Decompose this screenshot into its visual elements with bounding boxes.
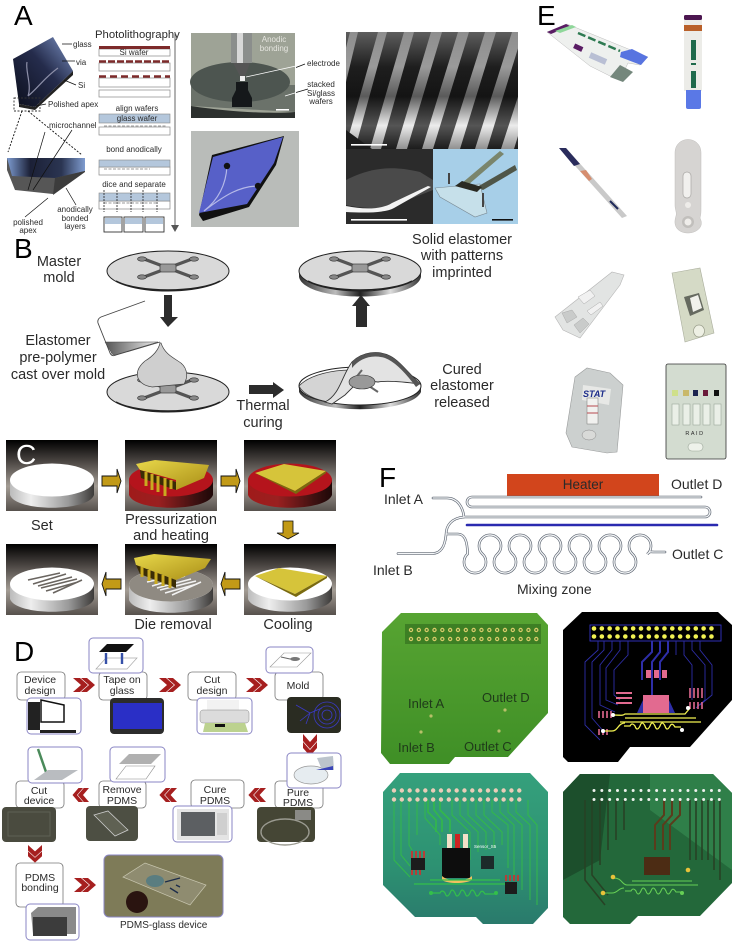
label: cured elastomer <box>430 362 494 411</box>
step: cut device: Cut <box>31 785 47 797</box>
photo: anodic bonding: Anodic <box>262 35 286 44</box>
device: wedge cassette <box>555 272 624 338</box>
step: cut design: design <box>197 685 228 697</box>
arrow right <box>249 382 284 398</box>
device: RAID cassette <box>666 364 726 459</box>
beaker pouring <box>98 301 160 356</box>
device: cassette 2 <box>672 268 714 342</box>
panel C: hot embossing <box>6 439 336 633</box>
arrow <box>221 469 240 493</box>
SEM images and device photo <box>346 32 518 224</box>
block labels: apex <box>19 226 37 235</box>
step: tape on glass: Tape on <box>103 674 141 686</box>
device: test strip 1 <box>547 24 648 82</box>
panel F: microfluidic PCB <box>373 462 732 924</box>
photolithography steps: Si wafer <box>120 48 149 57</box>
device: test strip 2 <box>684 15 702 109</box>
step: mold <box>266 647 341 733</box>
photolithography steps: bond anodically <box>106 145 162 154</box>
label: master mold: mold <box>43 270 75 286</box>
block labels: polished <box>13 218 43 227</box>
chevron <box>28 845 42 863</box>
panel D: PDMS workflow <box>2 636 341 940</box>
panel letter F: F <box>379 462 396 493</box>
chip labels: glass <box>73 40 92 49</box>
photo labels: stacked <box>307 80 335 89</box>
chevron <box>248 788 266 802</box>
block labels: layers <box>64 222 86 231</box>
master mold disc <box>107 251 229 291</box>
step: cut design: Cut <box>204 674 220 686</box>
chip labels: Si <box>78 81 85 90</box>
step: cure PDMS <box>173 780 244 842</box>
label: solid elastomer: with patterns <box>420 248 503 264</box>
PCB: bare green board <box>381 613 548 764</box>
block labels <box>13 205 93 235</box>
photo: finished chip <box>191 131 299 227</box>
process arrow <box>171 32 179 232</box>
photolithography steps: align wafers <box>116 104 158 113</box>
chevron <box>159 788 177 802</box>
label: solid elastomer <box>412 232 512 281</box>
panel A: silicon-glass chip fabrication <box>7 6 518 234</box>
schematic labels <box>373 476 723 597</box>
label: solid elastomer: imprinted <box>432 265 492 281</box>
chip labels <box>48 40 98 130</box>
step: pure PDMS <box>257 753 341 845</box>
chevron <box>159 678 181 692</box>
channel schematic <box>398 497 717 573</box>
device: cassette 1 <box>675 140 701 233</box>
tile: die removal <box>125 544 217 615</box>
chevron <box>246 678 268 692</box>
schematic labels: Mixing zone <box>517 581 592 597</box>
device: RAID cassette: RAID <box>685 431 705 437</box>
step: remove PDMS <box>86 747 165 841</box>
zoom arrows <box>8 111 82 155</box>
step: cut design <box>188 672 252 734</box>
label: thermal curing: curing <box>243 415 283 431</box>
PCB: fabricated back side <box>563 774 732 924</box>
tile: cooling <box>244 544 336 615</box>
step labels <box>31 512 313 633</box>
caption: PDMS-glass device <box>120 920 208 931</box>
device: STAT cassette: STAT <box>583 389 607 399</box>
label: cured elastomer: Cured <box>442 362 482 378</box>
label: cured elastomer: elastomer <box>430 378 494 394</box>
chevron <box>74 878 96 892</box>
PCB: bare green board: Inlet A <box>408 696 444 711</box>
step: mold: Mold <box>287 680 310 692</box>
block labels: anodically <box>57 205 93 214</box>
photolithography heading: Photolithography <box>95 29 180 41</box>
heater: Heater <box>563 477 604 492</box>
label: master mold: Master <box>37 254 81 270</box>
chip labels: Polished apex <box>48 100 98 109</box>
PCB: bare green board: Outlet C <box>464 739 512 754</box>
heater <box>507 474 659 498</box>
step: pure PDMS: Pure <box>287 787 309 799</box>
step: device design: Device <box>24 674 56 686</box>
label: elastomer pre-polymer: pre-polymer <box>19 350 97 366</box>
schematic labels: Outlet C <box>672 546 723 562</box>
panel letter D: D <box>14 636 34 667</box>
photo labels <box>246 59 340 106</box>
step: cut device: device <box>24 795 54 807</box>
photolithography steps: dice and separate <box>102 180 166 189</box>
step: device design <box>17 672 81 734</box>
arrow down <box>160 295 178 327</box>
step: cure PDMS: PDMS <box>200 795 230 807</box>
tile: pressed <box>244 440 336 511</box>
tile: final <box>6 544 98 615</box>
chip labels: microchannel <box>49 121 97 130</box>
step: cure PDMS: Cure <box>204 784 227 796</box>
label: elastomer pre-polymer: Elastomer <box>25 333 91 349</box>
step: remove PDMS: PDMS <box>107 795 137 807</box>
panel letter E: E <box>537 0 556 31</box>
label: thermal curing: Thermal <box>236 398 290 414</box>
arrow down <box>277 521 299 539</box>
panel letter B: B <box>14 233 33 264</box>
tile: pressurization <box>125 440 217 511</box>
arrow up <box>352 295 370 327</box>
chip schematic <box>13 37 76 111</box>
step labels: Set <box>31 518 53 534</box>
arrow <box>102 469 121 493</box>
step labels: and heating <box>133 528 209 544</box>
PCB: layout design <box>563 612 732 762</box>
step: PDMS bonding: PDMS <box>25 872 55 884</box>
label: elastomer pre-polymer: cast over mold <box>11 367 105 383</box>
step: device design: design <box>25 685 56 697</box>
step: tape on glass <box>89 638 164 734</box>
label: elastomer pre-polymer <box>11 333 105 383</box>
chip labels: via <box>76 58 87 67</box>
imprinted elastomer disc <box>299 251 421 296</box>
arrow <box>102 572 121 596</box>
schematic labels: Inlet A <box>384 491 424 507</box>
step: PDMS bonding: bonding <box>21 882 59 894</box>
label: master mold <box>37 254 81 286</box>
polished apex block <box>7 130 85 217</box>
step labels: Pressurization <box>125 512 217 528</box>
photo: anodic bonding: bonding <box>260 44 288 53</box>
photo labels: electrode <box>307 59 340 68</box>
PCB: bare green board: Inlet B <box>398 740 435 755</box>
panel letter C: C <box>16 439 36 470</box>
panel B: soft lithography <box>11 232 512 431</box>
cast disc <box>107 343 229 412</box>
PCB: bare green board: Outlet D <box>482 690 530 705</box>
panel E: commercial test strips <box>537 0 726 459</box>
photolithography steps: glass wafer <box>117 114 158 123</box>
block labels: bonded <box>62 214 88 223</box>
photo: anodic bonding <box>190 33 295 118</box>
chevron <box>73 678 95 692</box>
step: remove PDMS: Remove <box>102 784 142 796</box>
PCB: fabricated copper side: Sensor_S5 <box>474 844 497 849</box>
chevron <box>303 734 317 756</box>
cured elastomer disc <box>299 353 421 409</box>
step labels: Cooling <box>263 617 313 633</box>
label: thermal curing <box>236 398 290 431</box>
step: cut device <box>2 747 82 842</box>
step labels: Die removal <box>134 617 212 633</box>
photo: PDMS-glass device <box>104 855 223 917</box>
chevron <box>72 788 89 802</box>
label: solid elastomer: Solid elastomer <box>412 232 512 248</box>
schematic labels: Outlet D <box>671 476 722 492</box>
schematic labels: Inlet B <box>373 562 413 578</box>
step: tape on glass: glass <box>110 685 134 697</box>
step: PDMS bonding <box>16 863 79 940</box>
photolithography steps <box>99 46 170 232</box>
tile: set <box>6 440 98 511</box>
panel letter A: A <box>14 0 33 31</box>
photo labels: Si/glass <box>307 89 335 98</box>
device: STAT cassette <box>566 368 623 453</box>
device: dipstick <box>559 148 627 218</box>
step: pure PDMS: PDMS <box>283 797 313 809</box>
PCB: fabricated copper side <box>383 773 548 924</box>
photo labels: wafers <box>308 97 333 106</box>
label: cured elastomer: released <box>434 395 490 411</box>
arrow <box>221 572 240 596</box>
